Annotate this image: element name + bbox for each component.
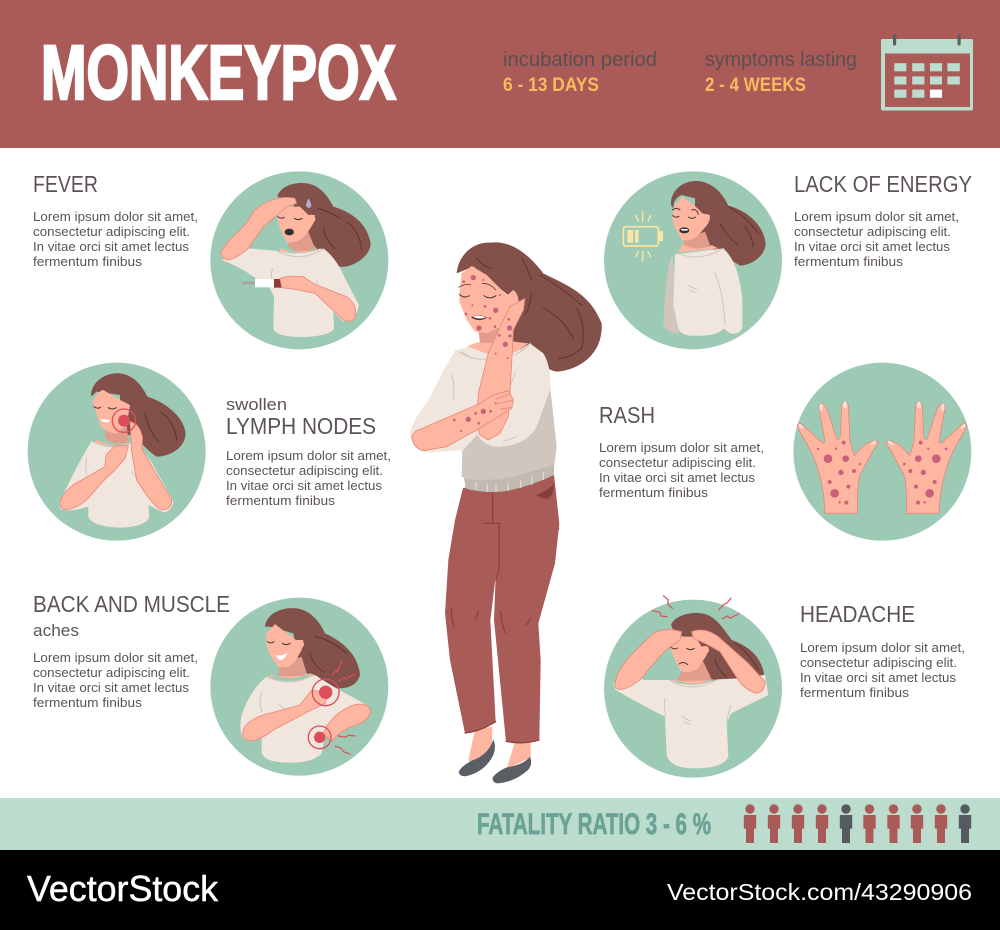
panel: back and muscle aches text: Lorem ipsum dolor sit amet, bbox=[33, 650, 198, 665]
panel: swollen lymph nodes text: In vitae orci sit amet lectus bbox=[226, 478, 383, 493]
panel: rash text: consectetur adipiscing elit. bbox=[599, 455, 756, 470]
panel: back and muscle aches text: consectetur adipiscing elit. bbox=[33, 665, 190, 680]
panel: headache text: HEADACHE bbox=[800, 601, 915, 627]
brand name: VectorStock bbox=[27, 868, 219, 909]
panel: headache text: Lorem ipsum dolor sit amet, bbox=[800, 640, 965, 655]
panel: lack of energy text: LACK OF ENERGY bbox=[794, 171, 972, 197]
symptoms lasting bbox=[705, 49, 857, 96]
panel: fever text: consectetur adipiscing elit. bbox=[33, 224, 190, 239]
icon: low battery bbox=[623, 212, 663, 261]
symptoms lasting: symptoms lasting bbox=[705, 49, 857, 71]
incubation period: 6 - 13 DAYS bbox=[503, 75, 599, 96]
left hand bbox=[797, 401, 878, 513]
panel: swollen lymph nodes text: fermentum finibus bbox=[226, 493, 336, 508]
illustration: headache woman bbox=[604, 596, 782, 778]
central figure: woman with rash bbox=[410, 242, 602, 783]
panel: swollen lymph nodes text: LYMPH NODES bbox=[226, 413, 376, 439]
panel: back and muscle aches text: fermentum finibus bbox=[33, 695, 143, 710]
panel: back and muscle aches text: aches bbox=[33, 621, 79, 640]
illustration: fever woman bbox=[210, 171, 388, 349]
panel: back and muscle aches text bbox=[33, 591, 230, 710]
panel: headache text bbox=[800, 601, 965, 700]
panel: lack of energy text: consectetur adipiscing elit. bbox=[794, 224, 951, 239]
panel: fever text: FEVER bbox=[33, 171, 98, 197]
panel: back and muscle aches text: BACK AND MUSCLE bbox=[33, 591, 230, 617]
panel: lack of energy text: In vitae orci sit amet lectus bbox=[794, 239, 951, 254]
panel: back and muscle aches text: In vitae orci sit amet lectus bbox=[33, 680, 190, 695]
right hand bbox=[886, 401, 967, 513]
pants and shoes bbox=[445, 475, 559, 783]
upper body bbox=[410, 242, 602, 530]
symptoms lasting: 2 - 4 WEEKS bbox=[705, 75, 806, 96]
panel: fever text: fermentum finibus bbox=[33, 254, 143, 269]
panel: fever text bbox=[33, 171, 198, 269]
panel: rash text: RASH bbox=[599, 402, 655, 428]
footer bar bbox=[0, 850, 1000, 930]
incubation period: incubation period bbox=[503, 49, 657, 71]
panel: swollen lymph nodes text bbox=[226, 395, 391, 508]
panel: rash text: Lorem ipsum dolor sit amet, bbox=[599, 440, 764, 455]
icon: calendar bbox=[881, 34, 973, 110]
panel: fever text: In vitae orci sit amet lectus bbox=[33, 239, 190, 254]
panel: swollen lymph nodes text: swollen bbox=[226, 395, 287, 414]
fatality ratio label: FATALITY RATIO 3 - 6 % bbox=[477, 808, 711, 841]
panel: lack of energy text: Lorem ipsum dolor sit amet, bbox=[794, 209, 959, 224]
title: MONKEYPOX bbox=[41, 30, 396, 116]
image url: VectorStock.com/43290906 bbox=[667, 879, 972, 905]
header banner bbox=[0, 0, 1000, 148]
incubation period bbox=[503, 49, 657, 96]
panel: headache text: fermentum finibus bbox=[800, 685, 910, 700]
illustration: rash on hands bbox=[793, 363, 971, 541]
panel: fever text: Lorem ipsum dolor sit amet, bbox=[33, 209, 198, 224]
panel: lack of energy text: fermentum finibus bbox=[794, 254, 904, 269]
panel: swollen lymph nodes text: Lorem ipsum dolor sit amet, bbox=[226, 448, 391, 463]
panel: lack of energy text bbox=[794, 171, 972, 269]
panel: swollen lymph nodes text: consectetur adipiscing elit. bbox=[226, 463, 383, 478]
panel: rash text: In vitae orci sit amet lectus bbox=[599, 470, 756, 485]
fatality ratio strip bbox=[0, 798, 1000, 850]
illustration: lack of energy woman bbox=[604, 171, 782, 349]
illustration: back and muscle aches woman bbox=[210, 598, 388, 776]
illustration: swollen lymph nodes woman bbox=[28, 363, 206, 541]
panel: rash text bbox=[599, 402, 764, 500]
panel: headache text: In vitae orci sit amet lectus bbox=[800, 670, 957, 685]
panel: rash text: fermentum finibus bbox=[599, 485, 709, 500]
icon row: people bbox=[744, 804, 971, 843]
panel: headache text: consectetur adipiscing elit. bbox=[800, 655, 957, 670]
